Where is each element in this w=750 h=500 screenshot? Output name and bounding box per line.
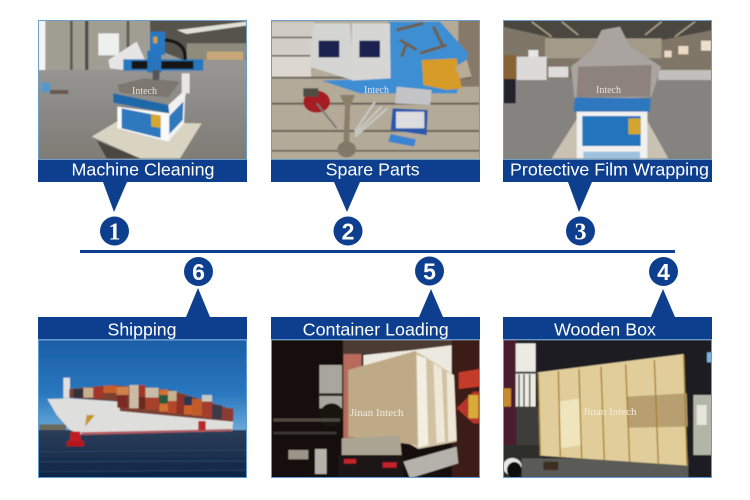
pointer — [103, 182, 127, 212]
image border — [272, 20, 480, 160]
step number 2: 2 — [342, 218, 354, 244]
image border — [504, 340, 712, 478]
pointer — [334, 182, 360, 212]
image border — [38, 340, 246, 478]
pointer — [419, 289, 443, 317]
step number 3 — [566, 216, 595, 246]
banner — [38, 160, 247, 182]
step number 1: 1 — [108, 220, 120, 246]
label: Protective Film Wrapping — [510, 160, 709, 180]
image border — [504, 20, 712, 160]
step number 2 — [334, 216, 362, 246]
photo: tools and spare parts — [271, 20, 481, 160]
watermark: Intech — [132, 86, 157, 97]
step number 4: 4 — [657, 259, 670, 285]
photo: container ship at sea — [38, 340, 248, 478]
timeline divider — [80, 250, 675, 253]
step number 4 — [649, 257, 678, 286]
watermark: Jinan Intech — [350, 407, 404, 419]
label: Spare Parts — [326, 160, 420, 180]
panel: container loading — [271, 256, 481, 478]
photo: machine wrapped in film — [503, 20, 713, 160]
photo: CNC machine in workshop — [38, 20, 248, 160]
label: Shipping — [108, 320, 176, 340]
panel: spare parts — [271, 20, 481, 245]
step number 6 — [184, 257, 213, 286]
photo: crate on truck — [271, 340, 481, 478]
panel: machine cleaning — [38, 20, 248, 245]
label: Machine Cleaning — [72, 160, 214, 180]
pointer — [568, 182, 592, 212]
panel: protective film wrapping — [503, 20, 713, 245]
banner — [271, 160, 480, 182]
photo: wooden crate in warehouse — [503, 340, 713, 478]
panel: wooden box — [503, 257, 713, 478]
step number 1 — [100, 216, 129, 246]
banner — [503, 317, 712, 339]
image border — [272, 340, 480, 478]
step number 5: 5 — [423, 258, 436, 284]
banner — [38, 317, 247, 339]
step number 5 — [415, 256, 444, 286]
step number 3: 3 — [574, 220, 586, 246]
image border — [38, 20, 246, 160]
banner — [271, 317, 480, 339]
pointer — [651, 289, 675, 317]
pointer — [186, 288, 210, 317]
step number 6: 6 — [192, 259, 205, 285]
label: Wooden Box — [554, 320, 656, 340]
watermark: Intech — [364, 85, 389, 96]
watermark: Intech — [596, 85, 621, 96]
label: Container Loading — [303, 320, 449, 340]
panel: shipping — [38, 257, 248, 478]
watermark: Jinan Intech — [583, 406, 637, 418]
banner — [503, 160, 712, 182]
